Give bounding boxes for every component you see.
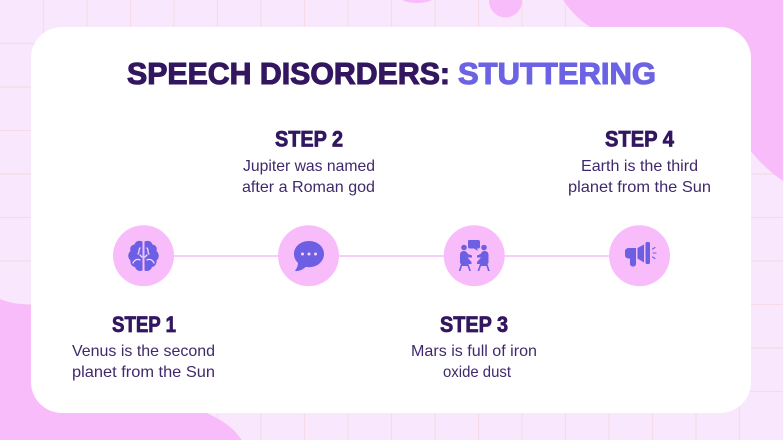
step 1 text: STEP 1 — [112, 312, 176, 337]
step 4 text: Earth is the third — [581, 158, 698, 175]
step 3 text — [411, 312, 537, 381]
step 1 icon: brain — [113, 225, 174, 286]
title — [127, 56, 656, 91]
step 3 text: oxide dust — [443, 364, 512, 381]
background blob: top small circle — [489, 0, 522, 18]
step 4 icon: megaphone — [609, 225, 670, 286]
step 3 icon: two people talking — [444, 225, 505, 286]
step 4 text: STEP 4 — [605, 126, 675, 152]
step 3 text: Mars is full of iron — [411, 343, 537, 360]
timeline connector — [143, 255, 640, 257]
title: STUTTERING — [458, 56, 656, 91]
step 2 text: after a Roman god — [242, 179, 375, 196]
step 4 text — [568, 126, 711, 196]
step 2 text — [242, 126, 375, 196]
step 2 text: STEP 2 — [275, 126, 343, 152]
step 3 text: STEP 3 — [440, 312, 508, 337]
step 2 text: Jupiter was named — [243, 158, 375, 175]
step 4 text: planet from the Sun — [568, 179, 711, 196]
step 2 icon: speech bubble — [278, 225, 339, 286]
step 1 text: Venus is the second — [72, 343, 215, 360]
background blob: bottom left — [0, 299, 242, 440]
background blob: top right — [563, 0, 783, 181]
step 1 text — [72, 312, 215, 381]
background blob: top center — [397, 0, 437, 3]
title: SPEECH DISORDERS: — [127, 56, 450, 91]
step 1 text: planet from the Sun — [72, 364, 215, 381]
